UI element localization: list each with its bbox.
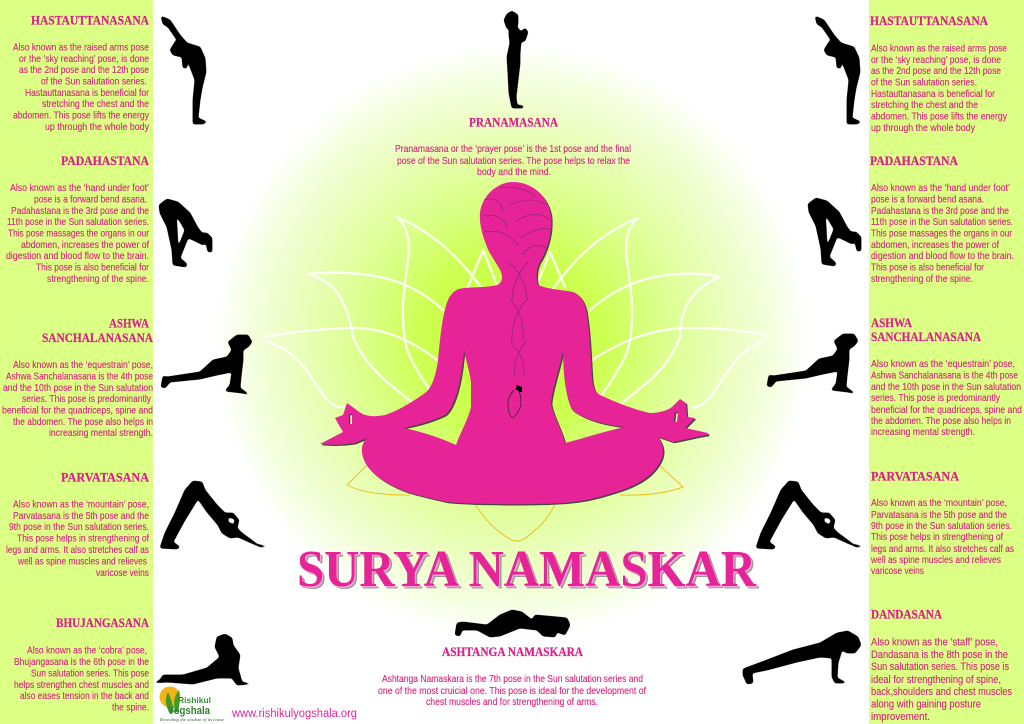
description: series. This pose is predominantly: [871, 393, 1001, 404]
description: [378, 674, 646, 708]
logo: Rishikul: [178, 695, 211, 705]
description: beneficial for the quadriceps, spine and: [2, 406, 153, 416]
description: increasing mental strength.: [49, 428, 153, 439]
heading: ASHTANGA NAMASKARA: [442, 645, 583, 659]
description: Also known as the ‘cobra’ pose,: [27, 646, 147, 656]
description: [6, 183, 150, 285]
description: the spine.: [112, 702, 149, 714]
icon: ashwa silhouette: [161, 335, 252, 395]
description: series. This pose is predominantly: [22, 394, 152, 405]
description: Hastauttanasana is beneficial for: [871, 89, 996, 100]
description: up through the whole body: [871, 123, 976, 134]
description: [13, 42, 150, 133]
description: [871, 183, 1014, 285]
description: [14, 646, 149, 714]
description: [871, 636, 1012, 723]
right: Hastauttanasana: [815, 14, 1008, 134]
description: Also known as the ‘staff’ pose,: [871, 636, 998, 648]
left: Ashwa Sanchalanasana: [2, 316, 252, 439]
description: well as spine muscles and relieves: [870, 555, 1001, 566]
description: or the ‘sky reaching’ pose, is done: [19, 54, 149, 65]
description: [871, 44, 1008, 134]
description: helps strengthen chest muscles and: [14, 680, 149, 691]
panel: right column: [869, 0, 1024, 724]
heading: BHUJANGASANA: [56, 616, 149, 630]
description: as the 2nd pose and the 12th pose: [871, 66, 1001, 77]
logo: Revealing the wisdom of its cause: [159, 717, 224, 722]
description: Hastauttanasana is beneficial for: [25, 88, 150, 99]
heading: SANCHALANASANA: [871, 330, 981, 344]
heading: ASHWA: [871, 316, 912, 330]
description: pose is a forward bend asana.: [34, 194, 147, 206]
icon: parvatasana silhouette: [756, 481, 865, 549]
description: This pose helps in strengthening of: [17, 534, 149, 544]
icon: ashtanga silhouette: [455, 610, 570, 637]
icon: padahastana silhouette: [808, 198, 861, 266]
description: improvement.: [871, 711, 930, 723]
left: Padahastana: [6, 154, 212, 285]
lotus petal outlines: [265, 217, 765, 410]
lotus gold lower petals: [347, 465, 683, 541]
left: Hastauttanasana: [13, 14, 207, 133]
description: body and the mind.: [477, 167, 551, 178]
description: Also known as the ‘equestrain’ pose,: [13, 360, 153, 371]
description: and the 10th pose in the Sun salutation: [3, 383, 153, 394]
title: SURYA NAMASKAR: [297, 541, 757, 598]
description: along with gaining posture: [871, 698, 981, 710]
description: Parvatasana is the 5th pose and the: [13, 511, 149, 522]
description: also eases tension in the back and: [20, 691, 149, 702]
description: or the ‘sky reaching’ pose, is done: [871, 55, 1001, 66]
description: varicose veins: [96, 568, 149, 579]
heading: PARVATASANA: [61, 470, 149, 484]
title: SURYA NAMASKAR: [300, 544, 760, 600]
description: Bhujangasana is the 6th pose in the: [14, 657, 149, 668]
description: Padahastana is the 3rd pose and the: [11, 206, 149, 217]
description: as the 2nd pose and the 12th pose: [19, 65, 149, 76]
heading: PADAHASTANA: [61, 154, 149, 168]
description: Also known as the raised arms pose: [13, 42, 149, 54]
description: the abdomen. The pose also helps in: [13, 417, 153, 428]
pose: Pranamasana: [395, 11, 631, 178]
description: [870, 498, 1014, 577]
description: varicose veins: [871, 566, 924, 577]
description: of the Sun salutation series.: [41, 76, 147, 88]
icon: ashwa silhouette: [767, 334, 858, 394]
description: up through the whole body: [45, 122, 150, 133]
description: This pose massages the organs in our: [8, 228, 150, 240]
description: [395, 144, 631, 178]
right: Ashwa Sanchalanasana: [767, 316, 1022, 438]
description: strengthening of the spine.: [47, 274, 149, 285]
logo: [159, 686, 224, 722]
heading: HASTAUTTANASANA: [870, 14, 988, 28]
right: Padahastana: [808, 154, 1014, 285]
description: Ashtanga Namaskara is the 7th pose in the Sun salutation series and: [382, 674, 643, 685]
icon: hastauttanasana silhouette: [815, 16, 861, 124]
description: increasing mental strength.: [871, 427, 975, 438]
icon: pranamasana silhouette: [504, 11, 528, 108]
heading: ASHWA: [109, 316, 149, 330]
title: SURYA NAMASKAR: [298, 542, 758, 600]
description: pose of the Sun salutation series. The pose helps to relax the: [397, 156, 630, 167]
description: 9th pose in the Sun salutation series.: [9, 522, 149, 533]
heading: PADAHASTANA: [870, 154, 958, 168]
description: This pose is also beneficial for: [36, 262, 150, 274]
description: Also known as the ‘mountain’ pose,: [13, 500, 149, 510]
heading: DANDASANA: [871, 608, 942, 622]
website url: www.rishikulyogshala.org: [231, 708, 357, 720]
description: [871, 359, 1022, 438]
left: Parvatasana: [6, 470, 269, 579]
heading: PRANAMASANA: [469, 116, 558, 130]
right: Dandasana: [743, 608, 1012, 723]
description: This pose helps in strengthening of: [871, 532, 1003, 543]
icon: bhujangasana silhouette: [153, 634, 253, 685]
pose: Ashtanga Namaskara: [378, 610, 646, 708]
description: 11th pose in the Sun salutation series.: [7, 217, 149, 228]
description: strengthening of the spine.: [871, 274, 973, 285]
hair tie and braid tip: [515, 385, 522, 392]
heading: PARVATASANA: [871, 470, 959, 484]
heading: [871, 316, 981, 344]
description: Pranamasana or the ‘prayer pose’ is the 1st pose and the final: [395, 144, 631, 155]
heading: [42, 316, 153, 345]
heading: HASTAUTTANASANA: [31, 14, 149, 28]
description: [6, 500, 149, 579]
hair braid lines: [482, 187, 552, 378]
icon: dandasana silhouette: [743, 631, 861, 684]
description: Sun salutation series. This pose: [31, 668, 149, 680]
description: chest muscles and for strengthening of arms.: [426, 697, 598, 708]
central meditating figure: [320, 182, 709, 506]
description: abdomen. This pose lifts the energy: [13, 110, 150, 122]
description: of the Sun salutation series.: [871, 78, 977, 88]
left: Bhujangasana: [14, 616, 253, 714]
right: Parvatasana: [756, 470, 1014, 577]
description: stretching the chest and the: [871, 100, 978, 111]
description: This pose is also beneficial for: [871, 262, 985, 274]
description: legs and arms. It also stretches calf as: [6, 545, 149, 556]
icon: parvatasana silhouette: [160, 481, 269, 549]
description: abdomen, increases the power of: [871, 240, 999, 251]
description: abdomen, increases the power of: [21, 240, 149, 251]
icon: hastauttanasana silhouette: [161, 16, 207, 124]
description: one of the most cruicial one. This pose is ideal for the development of: [378, 686, 646, 697]
logo: Yogshala: [168, 705, 211, 717]
icon: padahastana silhouette: [159, 199, 212, 267]
heading: SANCHALANASANA: [42, 331, 153, 345]
description: digestion and blood flow to the brain.: [6, 251, 149, 262]
description: [2, 360, 153, 439]
description: Ashwa Sanchalanasana is the 4th pose: [6, 372, 153, 382]
description: Also known as the ‘hand under foot’: [10, 183, 149, 194]
description: stretching the chest and the: [42, 99, 149, 110]
description: pose is a forward bend asana.: [871, 194, 984, 206]
panel: left column: [0, 0, 153, 724]
description: well as spine muscles and relieves: [17, 556, 147, 568]
